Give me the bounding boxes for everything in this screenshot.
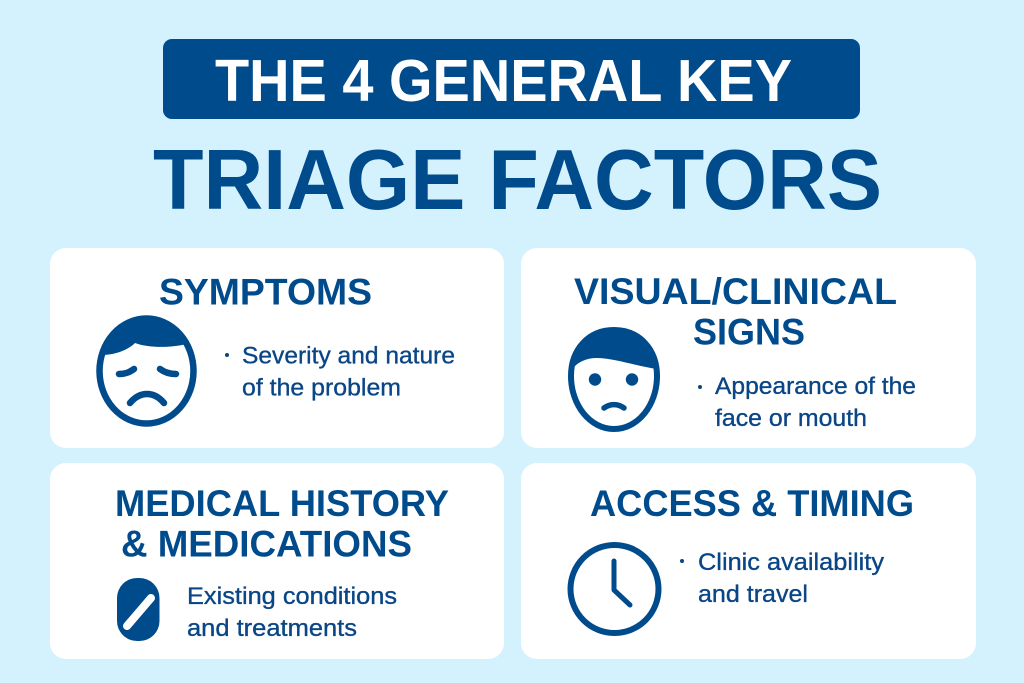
body text — [187, 583, 397, 642]
medical history heading: MEDICAL HISTORY — [115, 483, 449, 524]
medical history heading — [115, 483, 449, 564]
bullet text: Severity and nature — [242, 342, 455, 370]
bullet text — [698, 373, 916, 432]
visual signs heading: SIGNS — [693, 312, 805, 352]
bullet text — [225, 342, 455, 402]
panel: access and timing — [521, 463, 976, 659]
icon: worried face — [571, 330, 657, 429]
icon: sad face with closed eyes — [100, 318, 194, 424]
icon: pill — [117, 578, 160, 641]
panel: symptoms — [50, 248, 504, 448]
panel: visual/clinical signs — [521, 248, 976, 448]
access heading: ACCESS & TIMING — [590, 483, 914, 524]
heading: triage factors: TRIAGE FACTORS — [153, 133, 882, 228]
panel: medical history and medications — [50, 463, 504, 659]
medical history heading: & MEDICATIONS — [121, 524, 412, 564]
bullet text: of the problem — [242, 374, 401, 402]
visual signs heading: VISUAL/CLINICAL — [574, 271, 897, 312]
symptoms heading: SYMPTOMS — [159, 272, 372, 312]
body text: Existing conditions — [187, 583, 397, 610]
bullet text: face or mouth — [715, 405, 867, 432]
bullet text: Appearance of the — [715, 373, 916, 400]
visual signs heading — [574, 271, 897, 352]
bullet text: Clinic availability — [698, 549, 885, 576]
bullet text: and travel — [698, 581, 808, 608]
icon: clock — [570, 545, 658, 633]
title banner: THE 4 GENERAL KEY — [215, 48, 792, 114]
bullet text — [680, 549, 885, 608]
body text: and treatments — [187, 615, 357, 642]
